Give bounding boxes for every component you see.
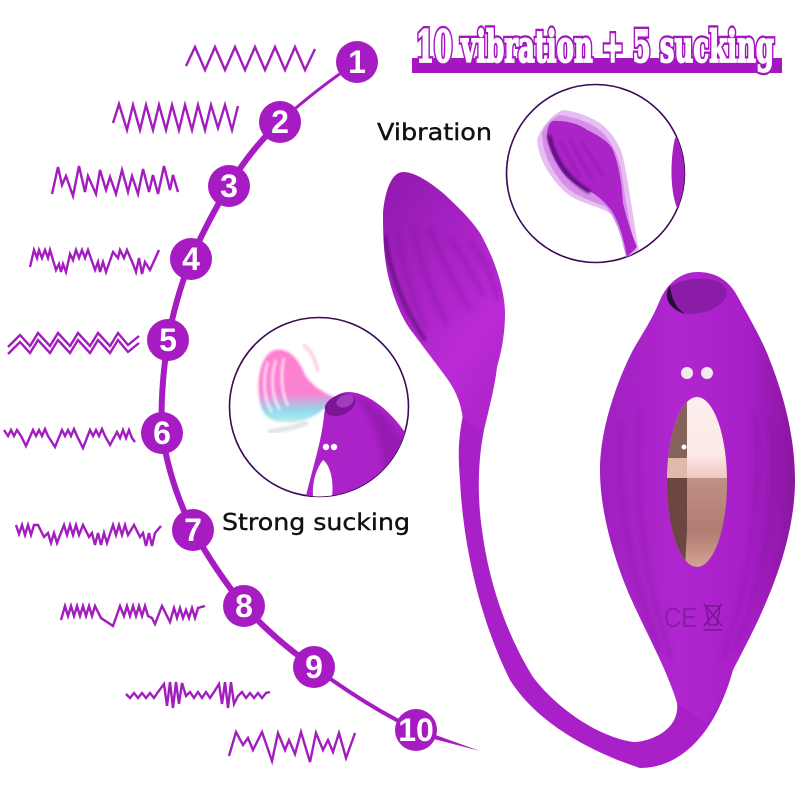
product: egg and connecting cord	[383, 172, 733, 768]
certification marks	[664, 602, 722, 633]
certification marks: CE	[664, 602, 697, 633]
label: Strong sucking: Strong sucking	[222, 510, 410, 536]
intensity arc with numbered modes: 7	[184, 512, 202, 548]
intensity arc with numbered modes: 1	[348, 44, 366, 80]
intensity arc with numbered modes: 5	[159, 322, 177, 358]
intensity arc with numbered modes: 10	[398, 712, 434, 748]
suction opening	[667, 279, 727, 314]
rose gold window	[667, 397, 728, 567]
inset: sucking detail	[230, 318, 410, 500]
intensity arc with numbered modes: 3	[220, 168, 238, 204]
intensity arc with numbered modes	[141, 41, 480, 751]
intensity arc with numbered modes: 8	[235, 588, 253, 624]
intensity arc with numbered modes: 9	[305, 649, 323, 685]
inset: vibration detail	[506, 84, 700, 262]
label: Vibration: Vibration	[377, 120, 492, 146]
intensity arc with numbered modes: 6	[153, 415, 171, 451]
intensity arc with numbered modes: 2	[271, 104, 289, 140]
intensity arc with numbered modes: 4	[182, 241, 200, 277]
product: main body	[600, 272, 795, 723]
control buttons	[681, 367, 713, 379]
vibration waveforms	[4, 47, 355, 762]
